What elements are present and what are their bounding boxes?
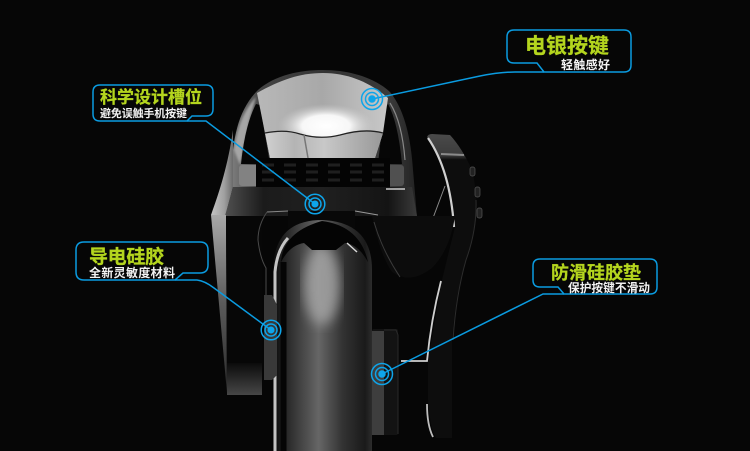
chrome button xyxy=(257,73,388,158)
subtext: 保护按键不滑动 xyxy=(568,281,650,295)
heading: 科学设计槽位 xyxy=(100,87,202,107)
marker: slot xyxy=(305,194,325,214)
marker: silver button xyxy=(362,88,382,110)
left silicone pad xyxy=(264,295,277,380)
right anti-slip pad xyxy=(372,329,398,435)
subtext: 全新灵敏度材料 xyxy=(89,265,175,280)
heading: 导电硅胶 xyxy=(89,245,164,268)
subtext: 避免误触手机按键 xyxy=(100,106,187,120)
subtext: 轻触感好 xyxy=(561,57,610,72)
right lever arm xyxy=(401,134,482,438)
housing band xyxy=(225,187,417,216)
right body shadow xyxy=(372,216,455,278)
heading: 防滑硅胶垫 xyxy=(551,262,641,283)
product: phone trigger illustration xyxy=(211,70,482,451)
phone tube xyxy=(273,220,372,451)
heading: 电银按键 xyxy=(525,35,609,58)
callout: anti-slip silicone pad xyxy=(382,259,657,374)
marker: conductive silicone xyxy=(261,320,281,340)
central neck xyxy=(258,211,400,295)
callout: silver button xyxy=(372,30,631,99)
dome housing xyxy=(211,70,417,217)
marker: anti-slip pad xyxy=(372,364,392,384)
comb area under button xyxy=(256,158,390,188)
callout: conductive silicone xyxy=(76,242,271,330)
callout: scientific slot design xyxy=(93,85,315,204)
left lower body xyxy=(211,215,262,395)
